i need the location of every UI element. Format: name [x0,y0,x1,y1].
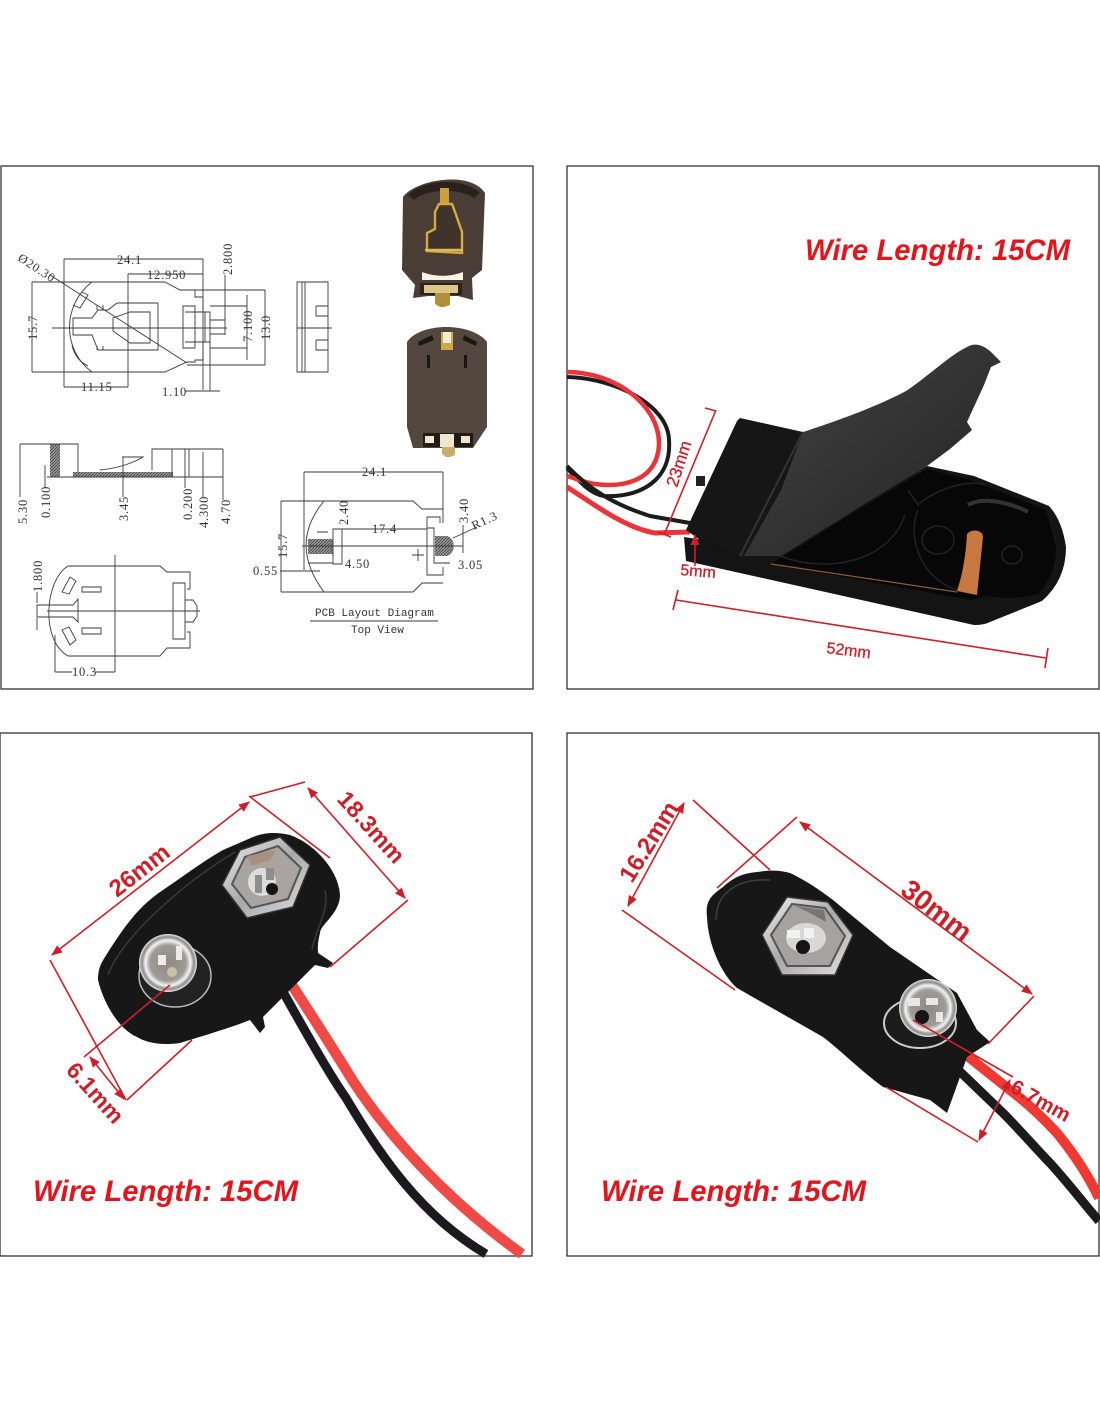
drawing: PCB layout diagram: 4.50 [345,557,370,571]
photo: coin cell holder front [402,180,485,307]
panel: battery snap connector left [0,733,532,1256]
drawing: top view with dimensions: 15.7 [26,315,40,340]
dimension 6.7mm [886,1020,1075,1142]
panel: cover battery holder photo [567,166,1099,689]
wires [567,372,690,533]
drawing: PCB layout diagram [253,465,500,637]
drawing: side view: 4.300 [197,496,211,528]
heading: Wire Length: 15CM [33,1175,299,1208]
drawing: side view: 5.30 [16,499,30,524]
wires [282,982,522,1254]
heading: Wire Length: 15CM [805,234,1071,267]
drawing: top view with dimensions: 12.950 [147,268,186,282]
drawing: side view: 4.70 [219,499,233,524]
holder base [684,466,1066,625]
connector body [98,833,340,1044]
drawing: top view with dimensions [15,243,273,399]
dimension 6.1mm [61,985,192,1129]
dimension 26mm [50,782,330,1100]
drawing: bottom view: 1.800 [31,560,45,592]
drawing: PCB layout diagram: 3.40 [457,498,471,523]
panel: battery snap connector right [567,733,1099,1256]
dimension 30mm: 30mm [895,873,978,948]
dimension 6.1mm: 6.1mm [61,1057,129,1129]
drawing: bottom view [31,555,200,679]
drawing: side view [16,444,233,528]
metal contact [957,530,983,595]
round terminal [139,934,211,1007]
drawing: PCB layout diagram: 3.05 [458,558,483,572]
dimension 6.7mm: 6.7mm [1007,1075,1075,1127]
wires [950,1046,1099,1221]
dimension 30mm [717,817,1034,1044]
dimension 5mm: 5mm [680,562,717,582]
dimension 52mm [673,590,1048,668]
drawing: side view: 3.45 [117,496,131,521]
hexagonal terminal [762,897,853,975]
drawing: top view with dimensions: 11.15 [81,380,113,394]
drawing: bottom view: 10.3 [72,665,97,679]
dimension 52mm: 52mm [826,640,872,662]
drawing: top view with dimensions: 1.10 [162,385,187,399]
drawing: top view with dimensions: 7.100 [241,310,255,342]
dimension 5mm [680,535,717,582]
drawing: PCB layout diagram: Top View [351,625,404,637]
drawing: top view with dimensions: 24.1 [117,253,142,267]
dimension 18.3mm [308,786,410,967]
dimension 16.2mm [614,797,770,990]
drawing: PCB layout diagram: R1.3 [469,509,500,533]
drawing: top view with dimensions: 2.800 [221,243,235,275]
holder interior [771,469,1056,600]
photo: coin cell holder back [407,327,487,457]
drawing: side profile [297,282,332,372]
drawing: PCB layout diagram: PCB Layout Diagram [315,608,434,620]
panel: technical drawing [1,166,533,689]
dimension 16.2mm: 16.2mm [614,797,684,887]
drawing: PCB layout diagram: 17.4 [372,522,397,536]
drawing: top view with dimensions: 13.0 [259,315,273,340]
drawing: top view with dimensions: Ø20.30 [15,251,58,285]
connector body [707,871,990,1113]
lid hinge panel [686,418,803,556]
drawing: PCB layout diagram: 15.7 [276,533,290,558]
small side pin [696,476,705,486]
drawing: side view: 0.200 [181,488,195,520]
heading: Wire Length: 15CM [601,1175,867,1208]
round terminal [884,979,957,1048]
dimension 23mm [658,408,716,537]
open lid [740,345,1001,556]
interior details [780,483,1028,592]
drawing: PCB layout diagram: 0.55 [253,564,278,578]
dimension 23mm: 23mm [663,438,695,489]
hexagonal terminal [222,837,310,918]
drawing: side view: 0.100 [39,486,53,518]
drawing: PCB layout diagram: 2.40 [337,500,351,525]
dimension 18.3mm: 18.3mm [332,786,410,868]
dimension 26mm: 26mm [104,839,175,903]
drawing: PCB layout diagram: 24.1 [362,465,387,479]
